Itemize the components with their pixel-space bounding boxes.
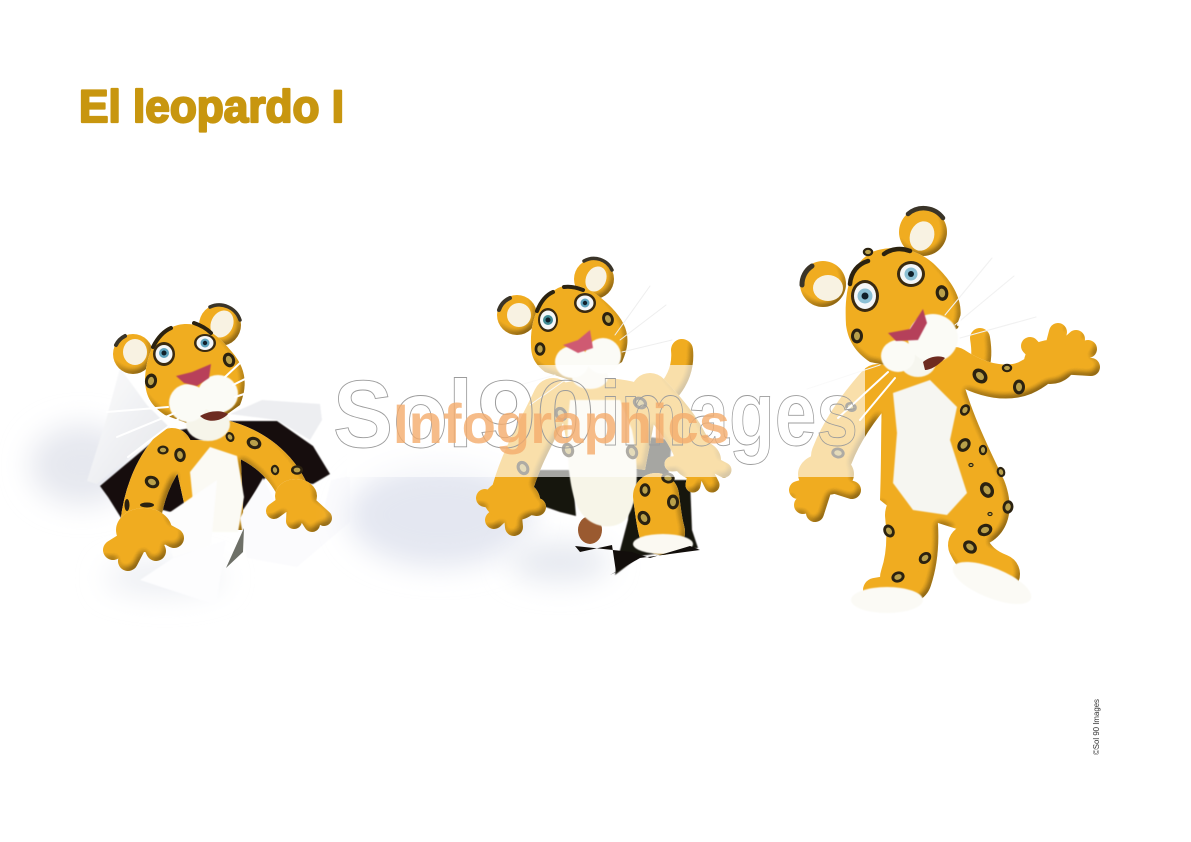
chest: [190, 447, 244, 532]
body spots: [514, 394, 679, 527]
feet: [851, 553, 1037, 613]
torn paper flap upper left: [87, 368, 170, 484]
torn paper crack: [226, 528, 244, 568]
body and arms: [140, 436, 295, 530]
ears: [497, 259, 614, 335]
mouth: [923, 356, 945, 370]
paper shadow left: [30, 425, 134, 505]
head marks: [535, 287, 616, 356]
tail stub: [978, 338, 981, 372]
belly: [568, 400, 637, 526]
tail: [664, 350, 682, 396]
body spots: [124, 430, 303, 511]
nose: [888, 309, 927, 341]
body spots: [830, 364, 1025, 584]
whiskers: [520, 286, 672, 405]
torn paper front right: [240, 476, 350, 567]
leg: [656, 496, 662, 532]
head: [846, 248, 961, 368]
paper shadow: [348, 463, 532, 567]
watermark: Infographics: Infographics: [393, 392, 730, 455]
watermark: Sol 90 images: images: [600, 363, 858, 465]
torso and limbs: [798, 332, 1091, 590]
eyes: [851, 261, 925, 312]
torn paper flap upper right: [230, 400, 322, 440]
foot: [633, 534, 693, 554]
dark hole: [100, 421, 330, 521]
ears: [800, 208, 947, 307]
watermark: Sol 90 images: [333, 361, 858, 468]
whiskers: [107, 363, 247, 457]
ear details: [116, 305, 240, 365]
leopard 1 breaking through paper: [30, 304, 350, 605]
black tear: [575, 545, 700, 575]
ear details: [499, 258, 612, 327]
ears: [113, 304, 241, 374]
belly: [893, 380, 967, 515]
ear details: [802, 208, 943, 301]
watermark: Sol 90 images: 90: [477, 361, 595, 468]
torso and limbs: [484, 378, 724, 527]
title: El leopardo I: [79, 81, 344, 132]
muzzle: [169, 375, 238, 441]
paper shadow bottom: [105, 562, 225, 594]
head: [145, 324, 245, 430]
muzzle: [555, 338, 621, 389]
torn paper bottom: [140, 540, 226, 605]
nose: [176, 364, 211, 386]
leopard 2 climbing through paper: [348, 258, 724, 582]
copyright: ©Sol 90 Images: [1092, 699, 1101, 755]
whiskers: [807, 258, 1036, 389]
eyes: [538, 293, 596, 332]
head marks: [144, 323, 237, 389]
paper shadow lower: [510, 542, 610, 582]
head marks: [850, 248, 950, 344]
nose: [563, 330, 593, 353]
leopard 3 standing: [798, 208, 1091, 613]
dark hole right: [615, 435, 698, 575]
muzzle: [881, 314, 958, 377]
eyes: [153, 334, 216, 366]
watermark: Sol 90 images: Sol: [333, 361, 473, 468]
paws: [113, 479, 324, 561]
dark hole left: [525, 470, 576, 516]
torn paper front: [163, 480, 217, 558]
bold whiskers: [838, 298, 968, 420]
watermark translucent band: [347, 365, 865, 477]
mouth: [200, 411, 228, 421]
under belly: [578, 516, 602, 544]
head: [531, 285, 627, 385]
